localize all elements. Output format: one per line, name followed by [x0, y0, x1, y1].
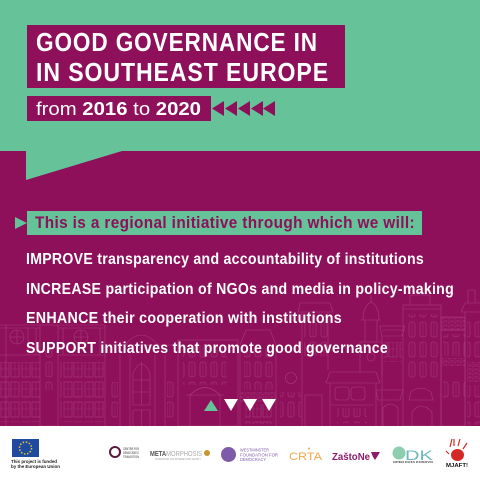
regional initiative heading: [15, 211, 422, 235]
logo: Center for Democratic Transition: TRANSITION: [123, 455, 140, 459]
logo: Center for Democratic Transition: CENTER FOR: [123, 447, 140, 451]
icon: EU flag: [12, 439, 39, 457]
logo: Center for Democratic Transition: DEMOCRATIC: [123, 451, 140, 455]
logo: CRTA: CRTA: [289, 451, 323, 463]
logo: MJAFT: [446, 439, 468, 469]
EU funding note: by the European Union: [11, 464, 60, 470]
logo: Center for Democratic Transition: [110, 447, 140, 459]
logo: Westminster Foundation for Democracy: FOUNDATION FOR: [240, 452, 278, 458]
logo: Metamorphosis: METAMORPHOSIS: [150, 449, 202, 458]
logo: Open Data Kosovo: DK: [405, 447, 434, 463]
subtitle: date range: from 2016 to 2020: [36, 99, 201, 119]
logo: Open Data Kosovo: [392, 446, 434, 464]
logo: MJAFT: MJAFT!: [446, 463, 468, 469]
logo: Westminster Foundation for Democracy: [221, 447, 278, 462]
pagination triangles: [204, 399, 276, 411]
arrows: left-pointing triangles: [212, 101, 275, 116]
city skyline line art: [0, 290, 480, 426]
subtitle: date range: [27, 96, 211, 121]
goal: enhance: ENHANCE their cooperation with institutions: [26, 310, 342, 327]
logo: Zasto Ne: ZaštoNe: [332, 452, 370, 463]
regional initiative heading: This is a regional initiative through which we will:: [35, 214, 415, 232]
speech bubble notch: [26, 151, 122, 180]
goal: improve: IMPROVE transparency and accountability of institutions: [26, 251, 424, 268]
goals list: [26, 251, 454, 357]
goal: support: SUPPORT initiatives that promote good governance: [26, 340, 388, 357]
logo: Westminster Foundation for Democracy: WESTMINSTER: [240, 448, 269, 452]
EU funding note: [11, 459, 60, 470]
logo: Westminster Foundation for Democracy: DEMOCRACY: [240, 457, 266, 462]
title: IN SOUTHEAST EUROPE: [36, 59, 329, 87]
purple main panel: [0, 151, 480, 426]
logo: Metamorphosis: FOUNDATION FOR INTERNET AND SOCIETY: [155, 458, 201, 461]
logo: Open Data Kosovo: OPEN DATA KOSOVO: [393, 460, 434, 464]
green header background: [0, 0, 480, 152]
footer: [0, 426, 480, 480]
title: GOOD GOVERNANCE IN: [36, 29, 318, 57]
title: [27, 25, 345, 88]
logo: CRTA: [289, 448, 323, 463]
EU funding note: This project is funded: [11, 459, 57, 465]
